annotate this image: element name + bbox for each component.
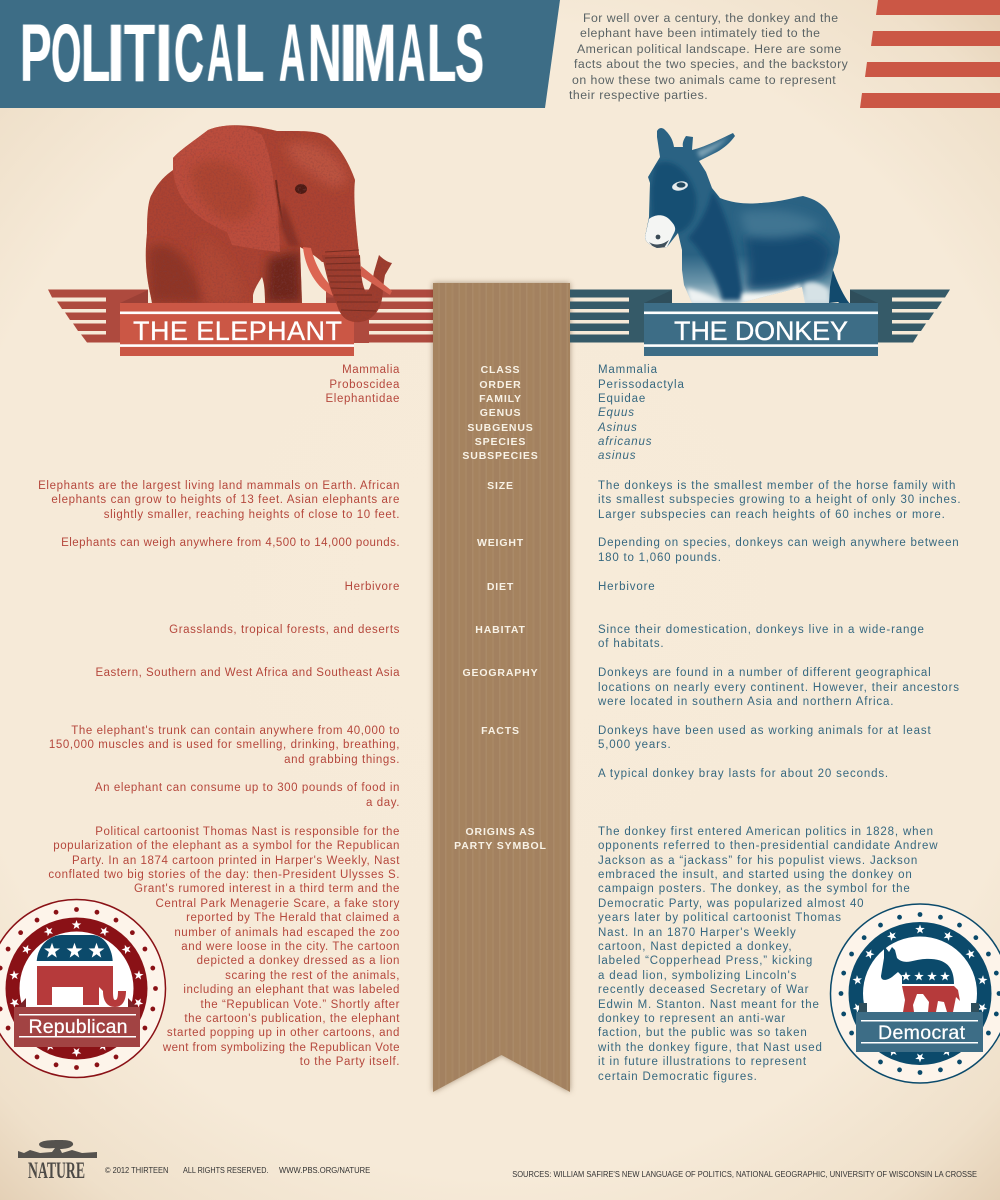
title: M: [353, 8, 397, 99]
elephant body: [146, 125, 360, 303]
donkey diet: Herbivore: [598, 581, 656, 593]
column: donkey taxonomy: Asinus: [598, 422, 638, 434]
elephant origins text: the “Republican Vote.” Shortly after: [200, 999, 400, 1011]
title: C: [174, 8, 204, 99]
column: donkey taxonomy: africanus: [598, 436, 652, 448]
elephant size: [38, 480, 400, 521]
elephant habitat: Grasslands, tropical forests, and deserts: [169, 624, 400, 636]
democrat badge: [830, 903, 1000, 1084]
donkey geography: Donkeys are found in a number of different geographical: [598, 667, 932, 679]
title: A: [398, 8, 425, 99]
title: I: [106, 8, 124, 99]
republican ribbon: [14, 998, 140, 1047]
column: elephant taxonomy: Proboscidea: [329, 379, 400, 391]
donkey origins text: a dead lion, symbolizing Lincoln's: [598, 970, 797, 982]
donkey origins text: Edwin M. Stanton. Nast meant for the: [598, 999, 820, 1011]
donkey ribbon wings: [570, 290, 950, 342]
origins label: ORIGINS AS: [466, 826, 535, 838]
column: center taxonomy labels: GENUS: [480, 407, 521, 419]
title: N: [308, 8, 341, 99]
column: center taxonomy labels: [462, 364, 539, 462]
donkey origins text: cartoon, Nast depicted a donkey,: [598, 941, 792, 953]
title: L: [235, 8, 264, 99]
size label: SIZE: [487, 480, 514, 492]
elephant origins text: popularization of the elephant as a symbol for the Republican: [53, 840, 400, 852]
column: elephant taxonomy: Elephantidae: [326, 393, 400, 405]
elephant origins text: went from symbolizing the Republican Vote: [163, 1042, 400, 1054]
column: donkey taxonomy: Equus: [598, 407, 635, 419]
ring of dots: [839, 912, 1000, 1075]
elephant tusks and trunk: [303, 247, 392, 322]
republican label: Republican: [28, 1016, 128, 1038]
elephant ribbon wings: [48, 290, 433, 343]
elephant section: [48, 125, 433, 356]
donkey origins text: Jackson as a “jackass” for his populist views. Jackson: [598, 855, 918, 867]
donkey facts: [598, 725, 932, 780]
elephant origins text: Party. In an 1874 cartoon printed in Harper's Weekly, Nast: [72, 855, 400, 867]
footer sources: SOURCES: WILLIAM SAFIRE'S NEW LANGUAGE OF POLITICS, NATIONAL GEOGRAPHIC, UNIVERSITY OF WISCONSIN LA CROSSE: [512, 1169, 977, 1179]
donkey tail: [829, 270, 853, 308]
column: center taxonomy labels: SUBSPECIES: [462, 450, 539, 462]
footer credits: ALL RIGHTS RESERVED.: [183, 1165, 268, 1175]
donkey habitat: [598, 624, 925, 650]
intro text: [569, 10, 848, 102]
donkey origins text: Nast. In an 1870 Harper's Weekly: [598, 927, 797, 939]
column: donkey taxonomy: Mammalia: [598, 364, 658, 376]
ring of stars: [8, 920, 145, 1057]
column: center taxonomy labels: ORDER: [479, 379, 522, 391]
donkey geography: were located in southern Asia and northern Africa.: [598, 696, 894, 708]
democrat label: Democrat: [878, 1022, 966, 1044]
origins label: [454, 826, 547, 852]
donkey weight: [598, 537, 959, 564]
donkey habitat: of habitats.: [598, 638, 664, 650]
elephant size: Elephants are the largest living land mammals on Earth. African: [38, 480, 400, 492]
column: donkey taxonomy: Perissodactyla: [598, 379, 685, 391]
elephant facts: [49, 725, 400, 809]
elephant heading: THE ELEPHANT: [133, 316, 342, 346]
flag stripes: [860, 0, 1000, 108]
icon: republican elephant: [37, 935, 126, 1007]
intro text: on how these two animals came to represent: [572, 73, 836, 87]
intro text: For well over a century, the donkey and the: [583, 10, 839, 24]
donkey origins text: The donkey first entered American politics in 1828, when: [598, 826, 934, 838]
title: L: [81, 8, 110, 99]
title: [20, 8, 484, 99]
column: donkey taxonomy: Equidae: [598, 393, 646, 405]
origins label: PARTY SYMBOL: [454, 840, 547, 852]
column: center taxonomy labels: SUBGENUS: [467, 422, 534, 434]
geography label: GEOGRAPHY: [463, 667, 538, 679]
intro text: elephant have been intimately tied to the: [580, 26, 820, 40]
footer credits: WWW.PBS.ORG/NATURE: [279, 1165, 370, 1175]
elephant facts: An elephant can consume up to 300 pounds of food in: [95, 782, 400, 794]
elephant origins text: reported by The Herald that claimed a: [186, 912, 400, 924]
column: center taxonomy labels: CLASS: [481, 364, 520, 376]
center ribbon: [429, 279, 574, 1094]
elephant ribbon front: [120, 303, 354, 356]
donkey ribbon front: [644, 303, 878, 356]
footer credits: [105, 1165, 370, 1175]
ring of stars: [852, 924, 988, 1062]
title: L: [427, 8, 456, 99]
elephant origins text: Central Park Menagerie Scare, a fake story: [156, 898, 400, 910]
intro text: their respective parties.: [569, 88, 708, 102]
header banner: [0, 0, 560, 108]
icon: democrat donkey: [881, 947, 960, 1012]
elephant origins text: conflated two big stories of the day: then-President Ulysses S.: [48, 869, 400, 881]
intro text: facts about the two species, and the backstory: [574, 57, 848, 71]
column: center taxonomy labels: SPECIES: [475, 436, 526, 448]
title: I: [154, 8, 172, 99]
elephant origins text: [48, 826, 400, 1068]
elephant facts: The elephant's trunk can contain anywhere from 40,000 to: [71, 725, 400, 737]
elephant origins text: including an elephant that was labeled: [183, 984, 400, 996]
title: I: [338, 8, 357, 99]
elephant facts: 150,000 muscles and is used for smelling, drinking, breathing,: [49, 739, 400, 751]
title: T: [124, 8, 155, 99]
column: center taxonomy labels: FAMILY: [479, 393, 522, 405]
elephant weight: Elephants can weigh anywhere from 4,500 to 14,000 pounds.: [61, 537, 400, 549]
ring of dots: [0, 907, 158, 1070]
elephant origins text: started popping up in other cartoons, and: [167, 1027, 400, 1039]
elephant facts: a day.: [366, 797, 400, 809]
donkey size: [598, 480, 961, 521]
elephant origins text: depicted a donkey dressed as a lion: [197, 955, 400, 967]
column: elephant taxonomy: Mammalia: [342, 364, 400, 376]
donkey habitat: Since their domestication, donkeys live in a wide-range: [598, 624, 925, 636]
elephant origins text: number of animals had escaped the zoo: [174, 927, 400, 939]
donkey weight: 180 to 1,060 pounds.: [598, 552, 722, 564]
title: O: [51, 8, 82, 99]
column: elephant taxonomy: [326, 364, 400, 405]
elephant origins text: the cartoon's publication, the elephant: [184, 1013, 400, 1025]
donkey facts: A typical donkey bray lasts for about 20 seconds.: [598, 768, 889, 780]
donkey origins text: certain Democratic figures.: [598, 1071, 758, 1083]
donkey origins text: embraced the insult, and started using the donkey on: [598, 869, 913, 881]
donkey heading: THE DONKEY: [674, 316, 848, 346]
title: P: [20, 8, 51, 99]
elephant origins text: to the Party itself.: [300, 1056, 400, 1068]
elephant origins text: Political cartoonist Thomas Nast is responsible for the: [95, 826, 400, 838]
donkey facts: 5,000 years.: [598, 739, 672, 751]
donkey origins text: Democratic Party, was popularized almost 40: [598, 898, 864, 910]
donkey origins text: it in future illustrations to represent: [598, 1056, 807, 1068]
donkey origins text: opponents referred to then-presidential candidate Andrew: [598, 840, 938, 852]
nature logo: [18, 1140, 97, 1183]
donkey origins text: labeled “Copperhead Press,” kicking: [598, 955, 813, 967]
elephant origins text: and were loose in the city. The cartoon: [181, 941, 400, 953]
column: donkey taxonomy: [598, 364, 685, 462]
habitat label: HABITAT: [475, 624, 526, 636]
donkey origins text: with the donkey figure, that Nast used: [598, 1042, 823, 1054]
donkey body: [645, 128, 840, 303]
column: donkey taxonomy: asinus: [598, 450, 636, 462]
donkey facts: Donkeys have been used as working animals for at least: [598, 725, 932, 737]
donkey origins text: years later by political cartoonist Thomas: [598, 912, 842, 924]
donkey section: [570, 128, 950, 356]
elephant origins text: scaring the rest of the animals,: [225, 970, 400, 982]
footer credits: © 2012 THIRTEEN: [105, 1165, 168, 1175]
donkey geography: [598, 667, 960, 708]
democrat ribbon: [856, 1003, 983, 1052]
donkey origins text: recently deceased Secretary of War: [598, 984, 809, 996]
donkey size: its smallest subspecies growing to a height of only 30 inches.: [598, 494, 961, 506]
title: S: [455, 8, 484, 99]
facts label: FACTS: [481, 725, 520, 737]
donkey origins text: campaign posters. The donkey, as the symbol for the: [598, 883, 911, 895]
weight label: WEIGHT: [477, 537, 524, 549]
elephant diet: Herbivore: [345, 581, 400, 593]
donkey origins text: faction, but the public was so taken: [598, 1027, 808, 1039]
elephant facts: and grabbing things.: [284, 754, 400, 766]
title: A: [279, 8, 305, 99]
elephant geography: Eastern, Southern and West Africa and Southeast Asia: [95, 667, 400, 679]
title: A: [207, 8, 233, 99]
diet label: DIET: [487, 581, 514, 593]
donkey weight: Depending on species, donkeys can weigh anywhere between: [598, 537, 959, 549]
republican badge: [0, 898, 166, 1078]
elephant size: elephants can grow to heights of 13 feet. Asian elephants are: [51, 494, 400, 506]
elephant size: slightly smaller, reaching heights of close to 10 feet.: [104, 509, 400, 521]
intro text: American political landscape. Here are some: [577, 42, 842, 56]
donkey origins text: donkey to represent an anti-war: [598, 1013, 786, 1025]
donkey size: Larger subspecies can reach heights of 60 inches or more.: [598, 509, 946, 521]
donkey geography: locations on nearly every continent. However, their ancestors: [598, 682, 960, 694]
donkey size: The donkeys is the smallest member of the horse family with: [598, 480, 956, 492]
donkey origins text: [598, 826, 938, 1083]
elephant origins text: Grant's rumored interest in a third term and the: [134, 883, 400, 895]
